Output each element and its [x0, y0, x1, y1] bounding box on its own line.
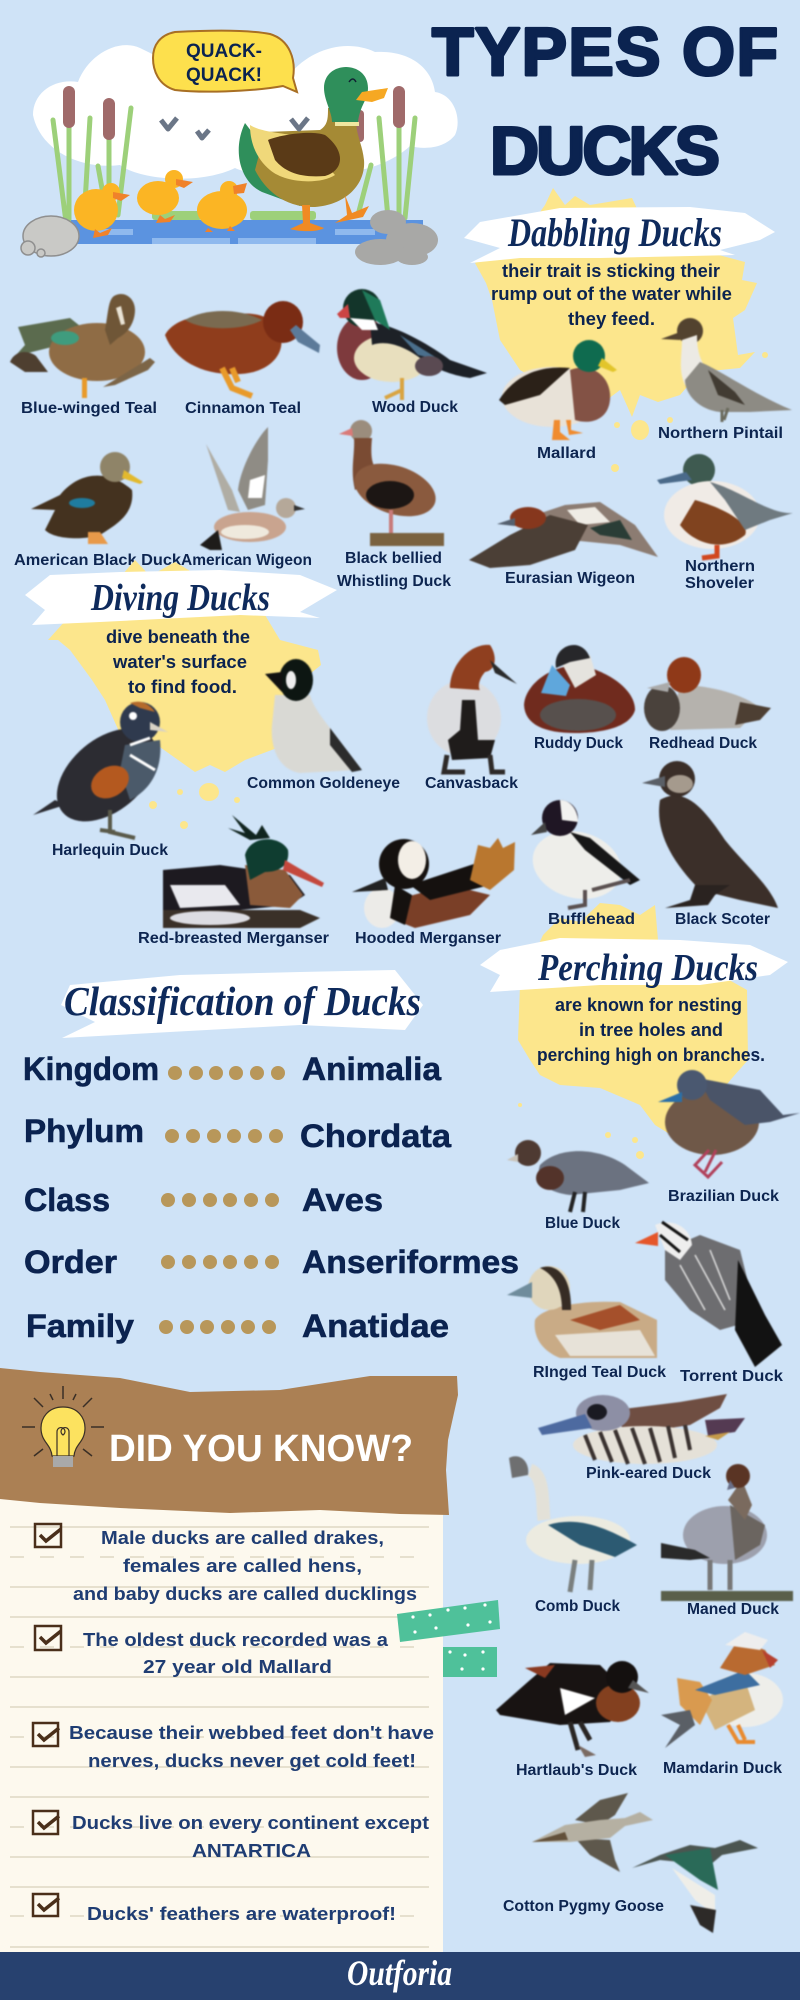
title: [432, 14, 778, 189]
label: Maned Duck: [687, 1601, 779, 1618]
duck: maned duck: [661, 1464, 793, 1618]
white brush stroke: [464, 207, 775, 263]
heading: Perching Ducks: [537, 947, 758, 989]
panel: did you know notes: [0, 1368, 458, 1955]
cloud: [33, 45, 458, 179]
fact: continents: Ducks live on every continent except: [72, 1813, 429, 1833]
fact: oldest duck: [35, 1626, 389, 1677]
label: Mallard: [537, 445, 596, 462]
splash droplets: [611, 352, 768, 472]
birds: [161, 118, 308, 138]
duck: red-breasted merganser: [138, 815, 329, 947]
fact: waterproof feathers: Ducks' feathers are waterproof!: [87, 1904, 396, 1924]
logo: Outforia: [347, 1953, 452, 1993]
row: kingdom: Kingdom: [23, 1051, 159, 1087]
fact: webbed feet: [33, 1723, 434, 1771]
label: Northern: [685, 558, 755, 575]
torn kraft paper banner: [0, 1368, 458, 1515]
description: [491, 261, 732, 329]
row: order: [24, 1244, 519, 1280]
duck: bufflehead: [525, 800, 640, 928]
reeds right: [358, 118, 415, 218]
white brush stroke: [61, 970, 423, 1038]
duck: black scoter: [642, 761, 778, 928]
label: Hooded Merganser: [355, 930, 501, 947]
duck: brazilian duck: [658, 1070, 800, 1205]
rocks right: [355, 210, 438, 265]
duck: ringed teal duck: [507, 1266, 666, 1381]
duck: ruddy duck: [524, 645, 635, 752]
splash droplets: [518, 1103, 644, 1159]
description: in tree holes and: [579, 1020, 723, 1040]
label: Cinnamon Teal: [185, 400, 301, 417]
label: Cotton Pygmy Goose: [503, 1898, 664, 1915]
fact: webbed feet: nerves, ducks never get cold feet!: [88, 1751, 416, 1771]
heading: Diving Ducks: [90, 577, 270, 619]
label: Whistling Duck: [337, 573, 451, 590]
illustration: duck family at the pond: [21, 31, 458, 265]
ducklings: [74, 170, 247, 231]
label: American Black Duck: [14, 552, 181, 569]
duck: harlequin duck: [33, 702, 175, 859]
rock left: [21, 216, 79, 257]
speech bubble: [153, 31, 297, 92]
duck: blue duck: [507, 1140, 649, 1232]
label: Torrent Duck: [680, 1368, 783, 1385]
white brush stroke: [25, 570, 337, 625]
label: Red-breasted Merganser: [138, 930, 329, 947]
duck: pink-eared duck: [538, 1394, 745, 1482]
reeds left: [53, 108, 131, 222]
fact: waterproof feathers: [33, 1894, 396, 1924]
label: Mamdarin Duck: [663, 1760, 782, 1777]
yellow splash: [48, 560, 321, 772]
speech bubble: QUACK!: [186, 65, 262, 86]
duck: american black duck: [14, 452, 181, 569]
icon: light bulb: [22, 1386, 104, 1467]
duck: common goldeneye: [247, 659, 400, 792]
title: DUCKS: [490, 113, 720, 189]
description: perching high on branches.: [537, 1045, 765, 1065]
description: they feed.: [568, 309, 655, 329]
description: rump out of the water while: [491, 284, 732, 304]
label: Blue-winged Teal: [21, 400, 157, 417]
heading: Classification of Ducks: [64, 978, 421, 1024]
label: [685, 558, 755, 592]
row: family: [26, 1308, 449, 1344]
fact: drakes, hens and ducklings: females are called hens,: [123, 1556, 362, 1576]
fact: continents: [33, 1811, 429, 1861]
fact: drakes, hens and ducklings: and baby ducks are called ducklings: [73, 1584, 417, 1604]
duck: hooded merganser: [352, 838, 515, 947]
duck: mandarin duck: [661, 1632, 783, 1777]
duck: torrent duck: [635, 1222, 783, 1385]
fact: oldest duck: 27 year old Mallard: [143, 1657, 332, 1677]
row: phylum: Phylum: [24, 1113, 144, 1149]
footer bar: [0, 1952, 800, 2000]
label: Pink-eared Duck: [586, 1465, 711, 1482]
duck: redhead duck: [644, 657, 771, 752]
description: are known for nesting: [555, 995, 742, 1015]
label: Hartlaub's Duck: [516, 1762, 637, 1779]
fact: continents: ANTARTICA: [192, 1841, 311, 1861]
duck: black-bellied whistling duck: [337, 420, 451, 590]
label: Black bellied: [345, 550, 442, 567]
label: Brazilian Duck: [668, 1188, 779, 1205]
label: Shoveler: [685, 575, 754, 592]
row: order: Anseriformes: [302, 1244, 519, 1280]
label: Ruddy Duck: [534, 735, 623, 752]
row: class: Aves: [302, 1182, 383, 1218]
row: class: [24, 1182, 383, 1218]
label: Common Goldeneye: [247, 775, 400, 792]
description: to find food.: [128, 677, 237, 697]
label: Comb Duck: [535, 1598, 620, 1615]
fact: drakes, hens and ducklings: Male ducks are called drakes,: [101, 1528, 384, 1548]
panel: classification of ducks: [23, 970, 519, 1344]
duck: northern pintail: [658, 318, 792, 442]
row: phylum: Chordata: [300, 1118, 451, 1154]
description: their trait is sticking their: [502, 261, 720, 281]
label: Bufflehead: [548, 911, 635, 928]
duck: canvasback: [425, 645, 518, 792]
fact: webbed feet: Because their webbed feet don't have: [69, 1723, 434, 1743]
row: family: Family: [26, 1308, 134, 1344]
label: [337, 550, 451, 590]
description: [106, 627, 250, 697]
duck: blue-winged teal: [10, 294, 157, 417]
yellow splash: [475, 188, 757, 417]
white brush stroke: [480, 938, 788, 992]
water: [71, 220, 423, 244]
panel: perching ducks: [480, 903, 788, 1159]
speech bubble: QUACK-: [186, 41, 262, 62]
fact: drakes, hens and ducklings: [35, 1524, 417, 1604]
duck: mallard: [499, 340, 617, 462]
duck: northern shoveler: [657, 454, 793, 592]
row: kingdom: Animalia: [302, 1051, 441, 1087]
duck: hartlaub's duck: [496, 1661, 649, 1779]
label: Blue Duck: [545, 1215, 620, 1232]
row: order: Order: [24, 1244, 117, 1280]
splash droplets: [149, 783, 240, 829]
washi tape strips: [397, 1600, 500, 1677]
description: dive beneath the: [106, 627, 250, 647]
duck: cinnamon teal: [165, 301, 320, 417]
label: Canvasback: [425, 775, 518, 792]
label: Redhead Duck: [649, 735, 757, 752]
large mallard: [239, 67, 388, 231]
label: Harlequin Duck: [52, 842, 168, 859]
duck: wood duck: [337, 289, 487, 416]
label: RInged Teal Duck: [533, 1364, 666, 1381]
row: family: Anatidae: [302, 1308, 449, 1344]
paper sheet: [0, 1495, 443, 1955]
label: Northern Pintail: [658, 425, 783, 442]
description: water's surface: [112, 652, 247, 672]
heading: DID YOU KNOW?: [109, 1428, 413, 1470]
title: TYPES OF: [432, 14, 778, 90]
label: American Wigeon: [181, 552, 312, 569]
yellow splash: [518, 903, 748, 1133]
label: Eurasian Wigeon: [505, 570, 635, 587]
row: class: Class: [24, 1182, 110, 1218]
panel: diving ducks: [25, 560, 337, 829]
label: Wood Duck: [372, 399, 458, 416]
label: Black Scoter: [675, 911, 770, 928]
duck: american wigeon: [181, 427, 312, 569]
row: phylum: [24, 1113, 451, 1154]
heading: Dabbling Ducks: [507, 210, 722, 255]
duck: cotton pygmy goose in flight: [503, 1793, 758, 1933]
row: kingdom: [23, 1051, 441, 1087]
fact: oldest duck: The oldest duck recorded was a: [83, 1630, 389, 1650]
duck: comb duck: [509, 1456, 637, 1615]
panel: dabbling ducks: [464, 188, 775, 472]
description: [537, 995, 765, 1065]
duck: eurasian wigeon: [469, 502, 658, 587]
